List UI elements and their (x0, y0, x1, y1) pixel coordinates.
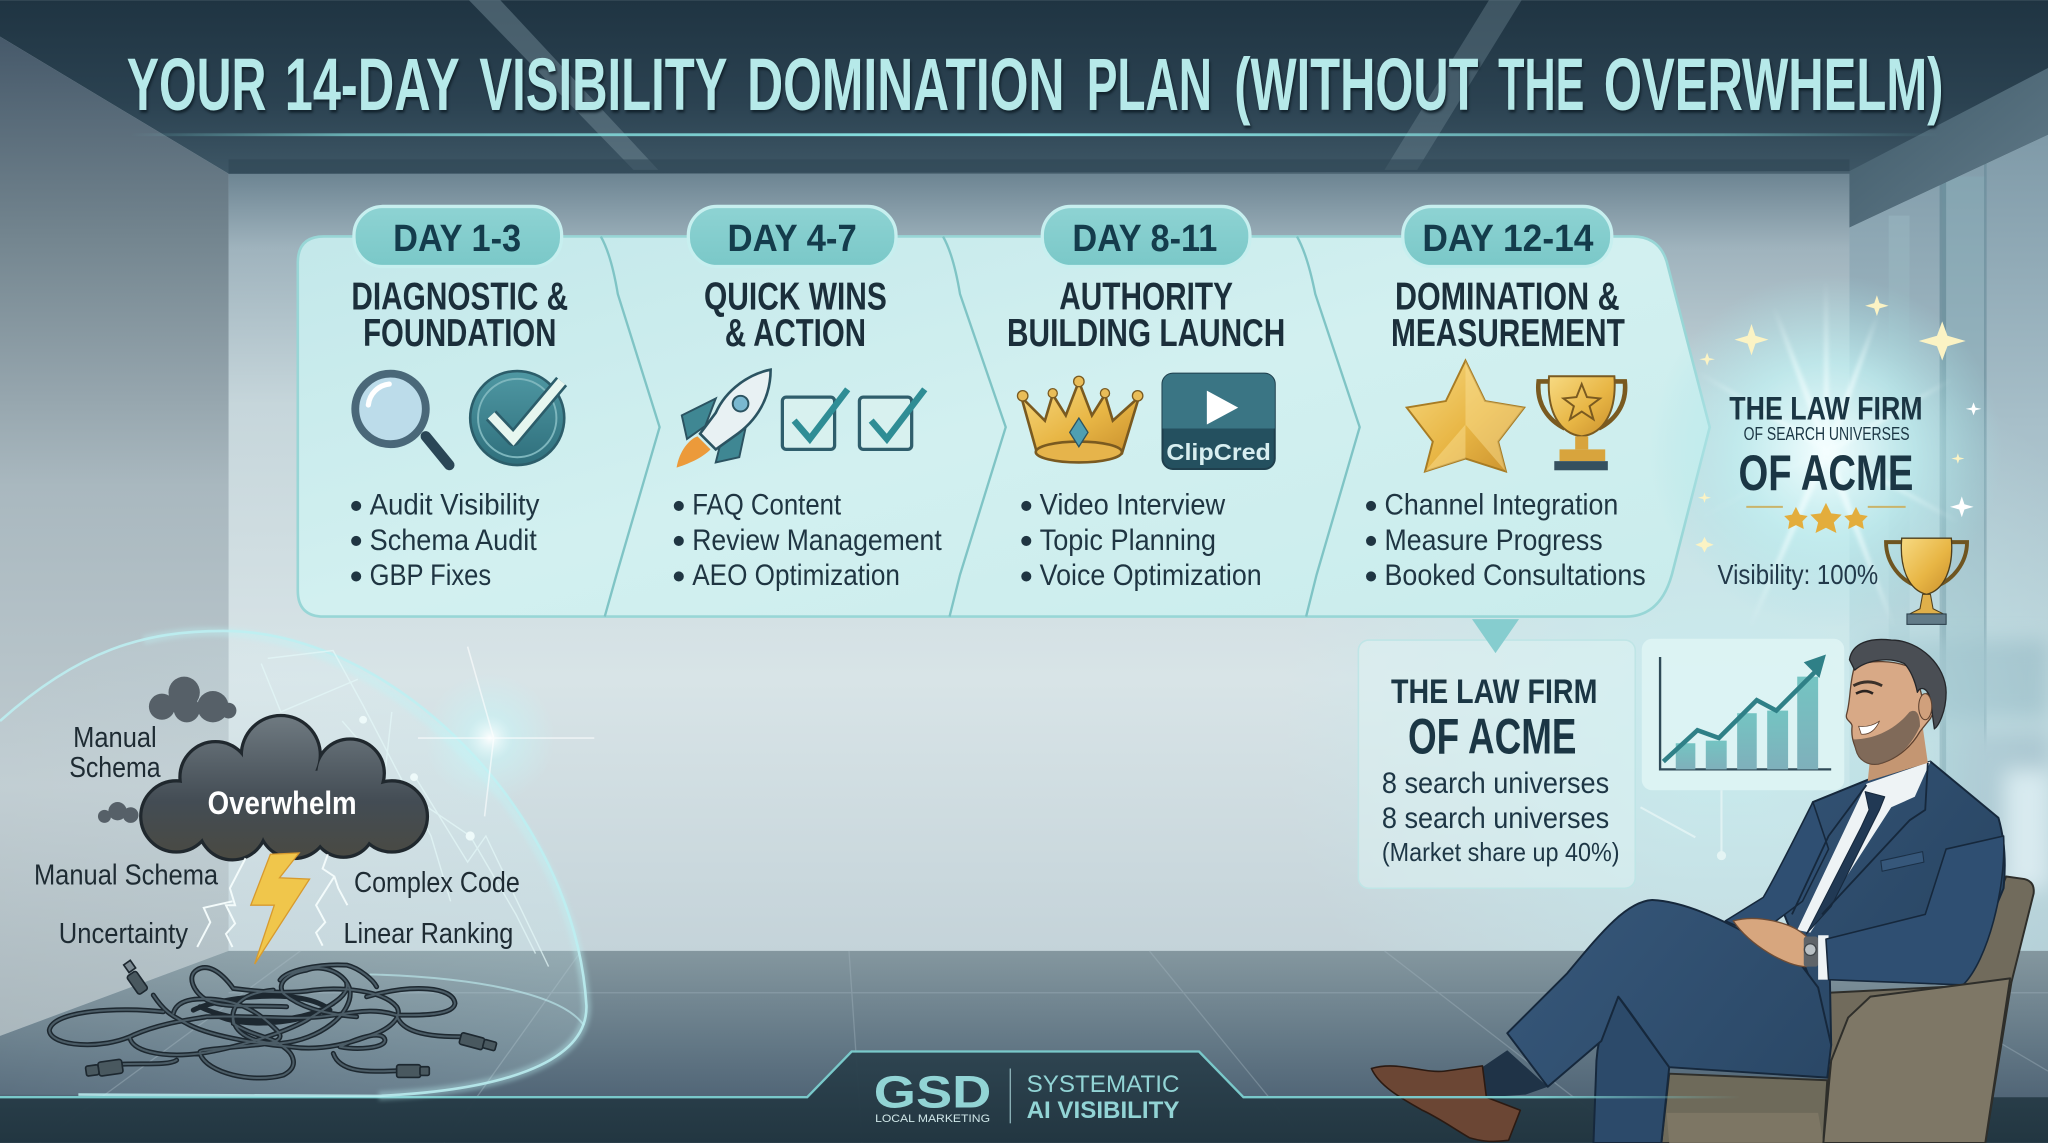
icon: side trophy (1886, 538, 1967, 624)
chair back and seat (1661, 876, 2034, 1143)
pill: day 12-14 (1403, 206, 1612, 267)
bullets: authority: • (1020, 486, 1032, 525)
pill: day 12-14: DAY 12-14 (1422, 218, 1593, 260)
title rule (131, 133, 1940, 136)
pill: day 1-3 (354, 206, 562, 267)
bullets: quick wins: AEO Optimization (692, 559, 900, 592)
result block: the law firm of search universes: THE LAW FIRM (1729, 389, 1923, 426)
heading: domination and measurement (1391, 276, 1625, 355)
heading: quick wins and action: QUICK WINS (704, 276, 887, 319)
bullets: domination: • (1365, 557, 1377, 596)
chair arm (1823, 978, 2010, 1143)
title: 14-DAY (285, 43, 460, 126)
chart: growth card (1640, 639, 1844, 860)
icon: three stars (1784, 503, 1868, 533)
bullets: domination: • (1365, 522, 1377, 561)
overwhelm labels: Manual (73, 722, 157, 754)
icon: magnifier (355, 374, 449, 465)
icon: crown (1017, 376, 1143, 462)
result block: the law firm of search universes (1718, 389, 1923, 590)
title: THE (1498, 43, 1584, 126)
storm cloud: overwhelm: Overwhelm (208, 784, 357, 821)
dome (0, 631, 594, 1096)
shirt and tie (1792, 762, 1930, 934)
title: YOUR (127, 43, 266, 126)
heading: diagnostic and foundation: DIAGNOSTIC & (351, 276, 568, 319)
shoe and sock (1371, 1050, 1548, 1141)
callout: law firm of acme: OF ACME (1408, 709, 1576, 765)
title: VISIBILITY (479, 43, 728, 126)
bullets: quick wins: • (673, 486, 685, 525)
bullets: diagnostic: GBP Fixes (370, 559, 491, 592)
bullets: diagnostic: Schema Audit (370, 524, 537, 557)
icon: rocket (677, 370, 771, 468)
bullets: quick wins: Review Management (692, 524, 942, 557)
bullets: authority (1020, 486, 1262, 596)
jacket body (1725, 762, 2005, 1045)
heading: authority building launch: AUTHORITY (1059, 276, 1233, 319)
heading: domination and measurement: MEASUREMENT (1391, 312, 1625, 355)
pill: day 8-11: DAY 8-11 (1072, 218, 1217, 260)
icon: gold trophy (1538, 376, 1625, 470)
bullets: quick wins (673, 486, 942, 596)
callout: law firm of acme: 8 search universes (1382, 802, 1609, 835)
icon: check badge (470, 371, 564, 465)
bullets: diagnostic: • (350, 557, 362, 596)
bullets: authority: Video Interview (1040, 489, 1225, 522)
overwhelm labels: Linear Ranking (344, 918, 513, 950)
man in suit in armchair (1371, 639, 2034, 1143)
right sleeve (1818, 836, 2004, 985)
bullets: domination (1365, 486, 1646, 596)
lightning bolt (251, 853, 310, 964)
logo: GSD local marketing: GSD (874, 1067, 991, 1118)
bullets: diagnostic: • (350, 522, 362, 561)
callout: law firm of acme: THE LAW FIRM (1391, 673, 1597, 711)
footer line (0, 1052, 2048, 1097)
pill: day 4-7: DAY 4-7 (728, 218, 857, 260)
bullets: quick wins: FAQ Content (692, 489, 842, 522)
callout: law firm of acme: 8 search universes (1382, 767, 1609, 800)
footer tagline: AI VISIBILITY (1027, 1097, 1179, 1124)
heading: quick wins and action: & ACTION (725, 312, 866, 355)
overwhelm labels: Complex Code (354, 867, 520, 899)
heading: diagnostic and foundation (351, 276, 568, 355)
result block: the law firm of search universes: Visibility: 100% (1718, 559, 1878, 590)
overwhelm labels: Manual Schema (34, 859, 218, 891)
bullets: authority: Voice Optimization (1040, 559, 1262, 592)
callout: law firm of acme: (Market share up 40%) (1382, 837, 1620, 867)
bullets: quick wins: • (673, 522, 685, 561)
sparkle halo behind result (1650, 274, 2002, 627)
footer tagline: SYSTEMATIC (1027, 1071, 1179, 1098)
icon: two checkboxes (782, 389, 925, 449)
heading: quick wins and action (704, 276, 887, 355)
title: DOMINATION (747, 43, 1064, 126)
icon: gold star (1407, 361, 1524, 472)
title: (WITHOUT (1234, 43, 1479, 126)
heading: authority building launch: BUILDING LAUNCH (1007, 312, 1285, 355)
icon: ClipCred video badge (1162, 374, 1275, 469)
bullets: diagnostic (350, 486, 539, 596)
bullets: quick wins: • (673, 557, 685, 596)
bullets: authority: Topic Planning (1040, 524, 1216, 557)
bullets: domination: Channel Integration (1384, 489, 1618, 522)
bullets: domination: • (1365, 486, 1377, 525)
bullets: domination: Measure Progress (1384, 524, 1603, 557)
under leg (1593, 997, 1669, 1143)
bullets: authority: • (1020, 522, 1032, 561)
footer bar (0, 1052, 2048, 1143)
overwhelm labels (34, 722, 520, 950)
overwhelm labels: Schema (69, 752, 161, 784)
small lightning strands (197, 854, 347, 947)
overwhelm labels: Uncertainty (59, 918, 189, 950)
top leg (1507, 900, 1831, 1087)
storm cloud: overwhelm (142, 717, 426, 858)
footer tagline (1027, 1071, 1179, 1124)
bullets: diagnostic: • (350, 486, 362, 525)
heading: domination and measurement: DOMINATION & (1395, 276, 1620, 319)
pill: day 8-11 (1042, 206, 1250, 267)
callout: law firm of acme (1358, 619, 1635, 888)
icon: ClipCred video badge: ClipCred (1166, 439, 1271, 465)
cable plugs (85, 960, 497, 1077)
logo: GSD local marketing: LOCAL MARKETING (875, 1113, 990, 1125)
heading: authority building launch (1007, 276, 1285, 355)
pill: day 1-3: DAY 1-3 (393, 218, 521, 260)
hand and watch (1733, 919, 1818, 967)
result block: the law firm of search universes: OF ACME (1738, 445, 1913, 501)
title (127, 43, 1944, 126)
panel: 14-day arrow timeline (298, 206, 1710, 617)
title: PLAN (1087, 43, 1212, 126)
bullets: authority: • (1020, 557, 1032, 596)
head (1846, 639, 1946, 781)
result block: the law firm of search universes: OF SEARCH UNIVERSES (1744, 423, 1910, 444)
pill: day 4-7 (688, 206, 896, 267)
bullets: diagnostic: Audit Visibility (370, 489, 539, 522)
heading: diagnostic and foundation: FOUNDATION (363, 312, 556, 355)
tangled cables (49, 960, 497, 1078)
bullets: domination: Booked Consultations (1384, 559, 1646, 592)
small storm clouds (98, 677, 236, 823)
sparkles (1695, 295, 1981, 553)
